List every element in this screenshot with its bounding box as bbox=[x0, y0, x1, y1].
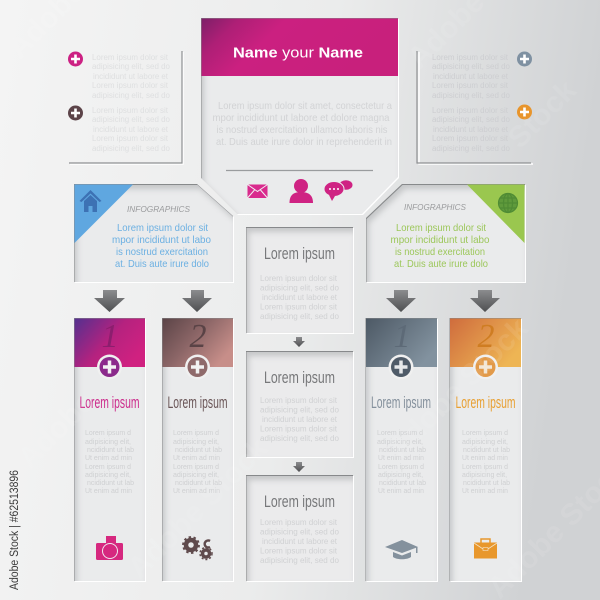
number: 2 bbox=[478, 318, 494, 355]
panel: center box 1 bbox=[246, 227, 353, 333]
box shape bbox=[246, 351, 353, 457]
icon: plus circle bbox=[388, 354, 414, 380]
text block: green: is nostrud exercitation bbox=[395, 246, 485, 258]
icon: brown plus bbox=[68, 106, 83, 120]
panel: center box 3 bbox=[246, 475, 353, 581]
text block: top left notes: Lorem ipsum dolor sit bbox=[92, 53, 169, 62]
text block: ncididunt ut lab bbox=[463, 478, 510, 487]
column header bbox=[450, 318, 521, 367]
text block bbox=[173, 428, 222, 495]
text block: top right notes: adipisicing elit, sed do bbox=[432, 91, 511, 100]
text block: center body: mpor incididunt ut labore et dolore magna bbox=[212, 112, 390, 124]
text block: top right notes: adipisicing elit, sed do bbox=[432, 62, 511, 71]
text block bbox=[377, 428, 426, 495]
watermark text: Adobe Stock bbox=[122, 432, 275, 585]
icon: camera bbox=[96, 536, 123, 560]
text block: top left notes: adipisicing elit, sed do bbox=[92, 62, 171, 71]
text block: Lorem ipsum dolor sit bbox=[260, 274, 338, 283]
heading: Lorem ipsum bbox=[371, 393, 431, 412]
text block: top right notes: incididunt ut labore et bbox=[433, 72, 509, 81]
text block: top right notes: Lorem ipsum dolor sit bbox=[432, 53, 509, 62]
text block: blue: is nostrud exercitation bbox=[116, 246, 208, 258]
text block: Lorem ipsum dolor sit bbox=[260, 518, 338, 527]
text block: Lorem ipsum dolor sit bbox=[260, 396, 338, 405]
heading: Lorem ipsum bbox=[456, 393, 516, 412]
arrow: center 1 bbox=[293, 337, 305, 347]
column shape bbox=[366, 318, 437, 581]
panel: center box 2 bbox=[246, 351, 353, 457]
number: 1 bbox=[102, 318, 118, 355]
text block: blue bbox=[112, 222, 211, 270]
icon: orange plus bbox=[517, 104, 532, 120]
text block: Lorem ipsum dolor sit bbox=[260, 424, 338, 434]
text block: ncididunt ut lab bbox=[175, 478, 222, 487]
icon: chat bubbles bbox=[324, 180, 352, 201]
text block: center body: is nostrud exercitation ullamco laboris nis bbox=[216, 124, 388, 136]
text block: Ut enim ad min bbox=[378, 453, 424, 462]
text block: adipisicing elit, bbox=[85, 470, 131, 479]
text block: adipisicing elit, sed do bbox=[260, 528, 340, 536]
panel: top left notes bbox=[68, 51, 183, 164]
text block: adipisicing elit, sed do bbox=[260, 434, 340, 443]
text block: Lorem ipsum d bbox=[377, 428, 423, 437]
panel: top right notes bbox=[417, 51, 533, 164]
text block bbox=[85, 428, 134, 495]
text block: incididunt ut labore et bbox=[262, 537, 338, 546]
stock id label: Adobe Stock | #62513896 bbox=[9, 470, 21, 590]
arrow: center 2 bbox=[293, 462, 305, 472]
text block: ncididunt ut lab bbox=[463, 445, 510, 454]
label: infographics: INFOGRAPHICS bbox=[127, 205, 191, 214]
icon: gears bbox=[183, 537, 212, 560]
text block bbox=[260, 274, 340, 321]
arrow: left 1 bbox=[94, 290, 125, 312]
text block: adipisicing elit, sed do bbox=[260, 284, 340, 292]
text block: adipisicing elit, sed do bbox=[260, 406, 340, 414]
text block: Lorem ipsum dolor sit bbox=[260, 302, 338, 312]
icon: graduation cap bbox=[385, 540, 418, 559]
watermark text: Adobe bbox=[12, 386, 101, 475]
text block: top left notes: incididunt ut labore et bbox=[93, 72, 169, 81]
text block: top right notes: adipisicing elit, sed do bbox=[432, 115, 511, 124]
text block: Ut enim ad min bbox=[462, 486, 508, 495]
text block: ncididunt ut lab bbox=[379, 445, 426, 454]
panel: center name card bbox=[201, 18, 398, 214]
text block: top left notes: adipisicing elit, sed do bbox=[92, 91, 171, 100]
text block: incididunt ut labore et bbox=[262, 415, 338, 424]
text block: Lorem ipsum d bbox=[462, 462, 508, 471]
icon: envelope bbox=[248, 184, 268, 198]
watermark text: Stock bbox=[502, 74, 583, 155]
header band bbox=[202, 18, 398, 76]
text block: Lorem ipsum d bbox=[173, 462, 219, 471]
text block: Lorem ipsum d bbox=[378, 462, 424, 471]
text block: Lorem ipsum d bbox=[85, 428, 131, 437]
card shape bbox=[201, 18, 398, 214]
text block: top left notes: incididunt ut labore et bbox=[93, 125, 169, 134]
heading: Lorem ipsum bbox=[168, 393, 228, 412]
text block: adipisicing elit, bbox=[173, 437, 219, 446]
panel: column 1 purple bbox=[74, 318, 145, 581]
panel: left blue card bbox=[74, 184, 233, 282]
column shape bbox=[162, 318, 233, 581]
text block: top right notes: adipisicing elit, sed do bbox=[432, 144, 511, 153]
text block: center body bbox=[212, 100, 392, 148]
text block: top right notes: Lorem ipsum dolor sit bbox=[432, 134, 509, 143]
text block: center body: at. Duis aute irure dolor in reprehenderit in bbox=[216, 136, 392, 148]
text block: green: at. Duis aute irure dolo bbox=[394, 258, 488, 270]
icon: grey plus bbox=[517, 52, 532, 66]
text block: ncididunt ut lab bbox=[87, 445, 134, 454]
text block: top right notes: Lorem ipsum dolor sit bbox=[432, 81, 509, 90]
text block: top left notes: adipisicing elit, sed do bbox=[92, 144, 171, 153]
text block: green: mpor incididunt ut labo bbox=[390, 234, 490, 246]
text block: adipisicing elit, bbox=[85, 437, 131, 446]
text block: top right notes bbox=[432, 53, 511, 153]
text block: Ut enim ad min bbox=[378, 486, 424, 495]
arrow: right 2 bbox=[470, 290, 500, 312]
text block: adipisicing elit, bbox=[173, 470, 219, 479]
text block: Ut enim ad min bbox=[85, 486, 132, 495]
text block: adipisicing elit, sed do bbox=[260, 556, 340, 565]
heading: Lorem ipsum bbox=[264, 244, 335, 263]
card shape bbox=[74, 184, 233, 282]
text block: ncididunt ut lab bbox=[87, 478, 134, 487]
text block: green bbox=[390, 222, 490, 270]
icon: person bbox=[290, 179, 313, 203]
title: Name your Name bbox=[233, 44, 363, 62]
arrow: right 1 bbox=[386, 290, 416, 312]
text block: top right notes: incididunt ut labore et bbox=[433, 125, 509, 134]
text block: top left notes: adipisicing elit, sed do bbox=[92, 115, 171, 124]
number: 2 bbox=[190, 318, 206, 355]
text block: Ut enim ad min bbox=[462, 453, 508, 462]
text block: adipisicing elit, bbox=[462, 437, 508, 446]
icon: globe bbox=[498, 194, 518, 212]
text block: top left notes: Lorem ipsum dolor sit bbox=[92, 106, 169, 115]
blue corner bbox=[74, 184, 133, 243]
column header bbox=[74, 318, 145, 367]
column shape bbox=[74, 318, 145, 581]
text block: Lorem ipsum d bbox=[462, 428, 508, 437]
panel: column 2 brown bbox=[162, 318, 233, 581]
text block bbox=[260, 518, 340, 565]
text block bbox=[462, 428, 510, 495]
icon: briefcase bbox=[474, 539, 497, 558]
column header bbox=[162, 318, 233, 367]
label: infographics: INFOGRAPHICS bbox=[404, 203, 467, 212]
column header bbox=[366, 318, 437, 367]
text block: Ut enim ad min bbox=[85, 453, 132, 462]
panel: column 3 slate bbox=[366, 318, 437, 581]
text block: Lorem ipsum d bbox=[173, 428, 219, 437]
arrow: left 2 bbox=[182, 290, 212, 312]
text block: Lorem ipsum dolor sit bbox=[260, 546, 338, 556]
text block: top left notes: Lorem ipsum dolor sit bbox=[92, 134, 169, 143]
watermark text: Adobe Stock bbox=[382, 312, 535, 465]
text block: Ut enim ad min bbox=[173, 486, 220, 495]
text block: adipisicing elit, sed do bbox=[260, 312, 340, 321]
card shape bbox=[366, 184, 525, 282]
panel: column 4 orange bbox=[450, 318, 521, 581]
panel: right green card bbox=[366, 184, 525, 282]
icon: home bbox=[80, 190, 102, 212]
text block: top right notes: Lorem ipsum dolor sit bbox=[432, 106, 509, 115]
icon: plus circle bbox=[185, 354, 210, 380]
text block: center body: Lorem ipsum dolor sit amet, consectetur a bbox=[218, 100, 392, 112]
text block: Ut enim ad min bbox=[173, 453, 220, 462]
text block: top left notes bbox=[92, 53, 171, 153]
text block: top left notes: Lorem ipsum dolor sit bbox=[92, 81, 169, 90]
text block bbox=[260, 396, 340, 443]
text block: blue: at. Duis aute irure dolo bbox=[115, 258, 209, 270]
box shape bbox=[246, 227, 353, 333]
number: 1 bbox=[394, 318, 410, 355]
text block: incididunt ut labore et bbox=[262, 293, 338, 302]
text block: ncididunt ut lab bbox=[379, 478, 426, 487]
text block: blue: mpor incididunt ut labo bbox=[112, 234, 211, 246]
text block: Lorem ipsum d bbox=[85, 462, 131, 471]
green corner bbox=[467, 184, 524, 243]
text block: adipisicing elit, bbox=[378, 470, 423, 479]
heading: Lorem ipsum bbox=[80, 393, 140, 412]
text block: ncididunt ut lab bbox=[175, 445, 222, 454]
icon: pink plus bbox=[68, 52, 83, 66]
box shape bbox=[246, 475, 353, 581]
text block: adipisicing elit, bbox=[462, 470, 507, 479]
text block: blue: Lorem ipsum dolor sit bbox=[117, 222, 208, 234]
text block: green: Lorem ipsum dolor sit bbox=[396, 222, 486, 234]
text block: adipisicing elit, bbox=[377, 437, 423, 446]
heading: Lorem ipsum bbox=[264, 368, 335, 387]
icon: plus circle bbox=[473, 354, 498, 380]
icon: plus circle bbox=[97, 354, 122, 380]
column shape bbox=[450, 318, 521, 581]
heading: Lorem ipsum bbox=[264, 492, 335, 511]
